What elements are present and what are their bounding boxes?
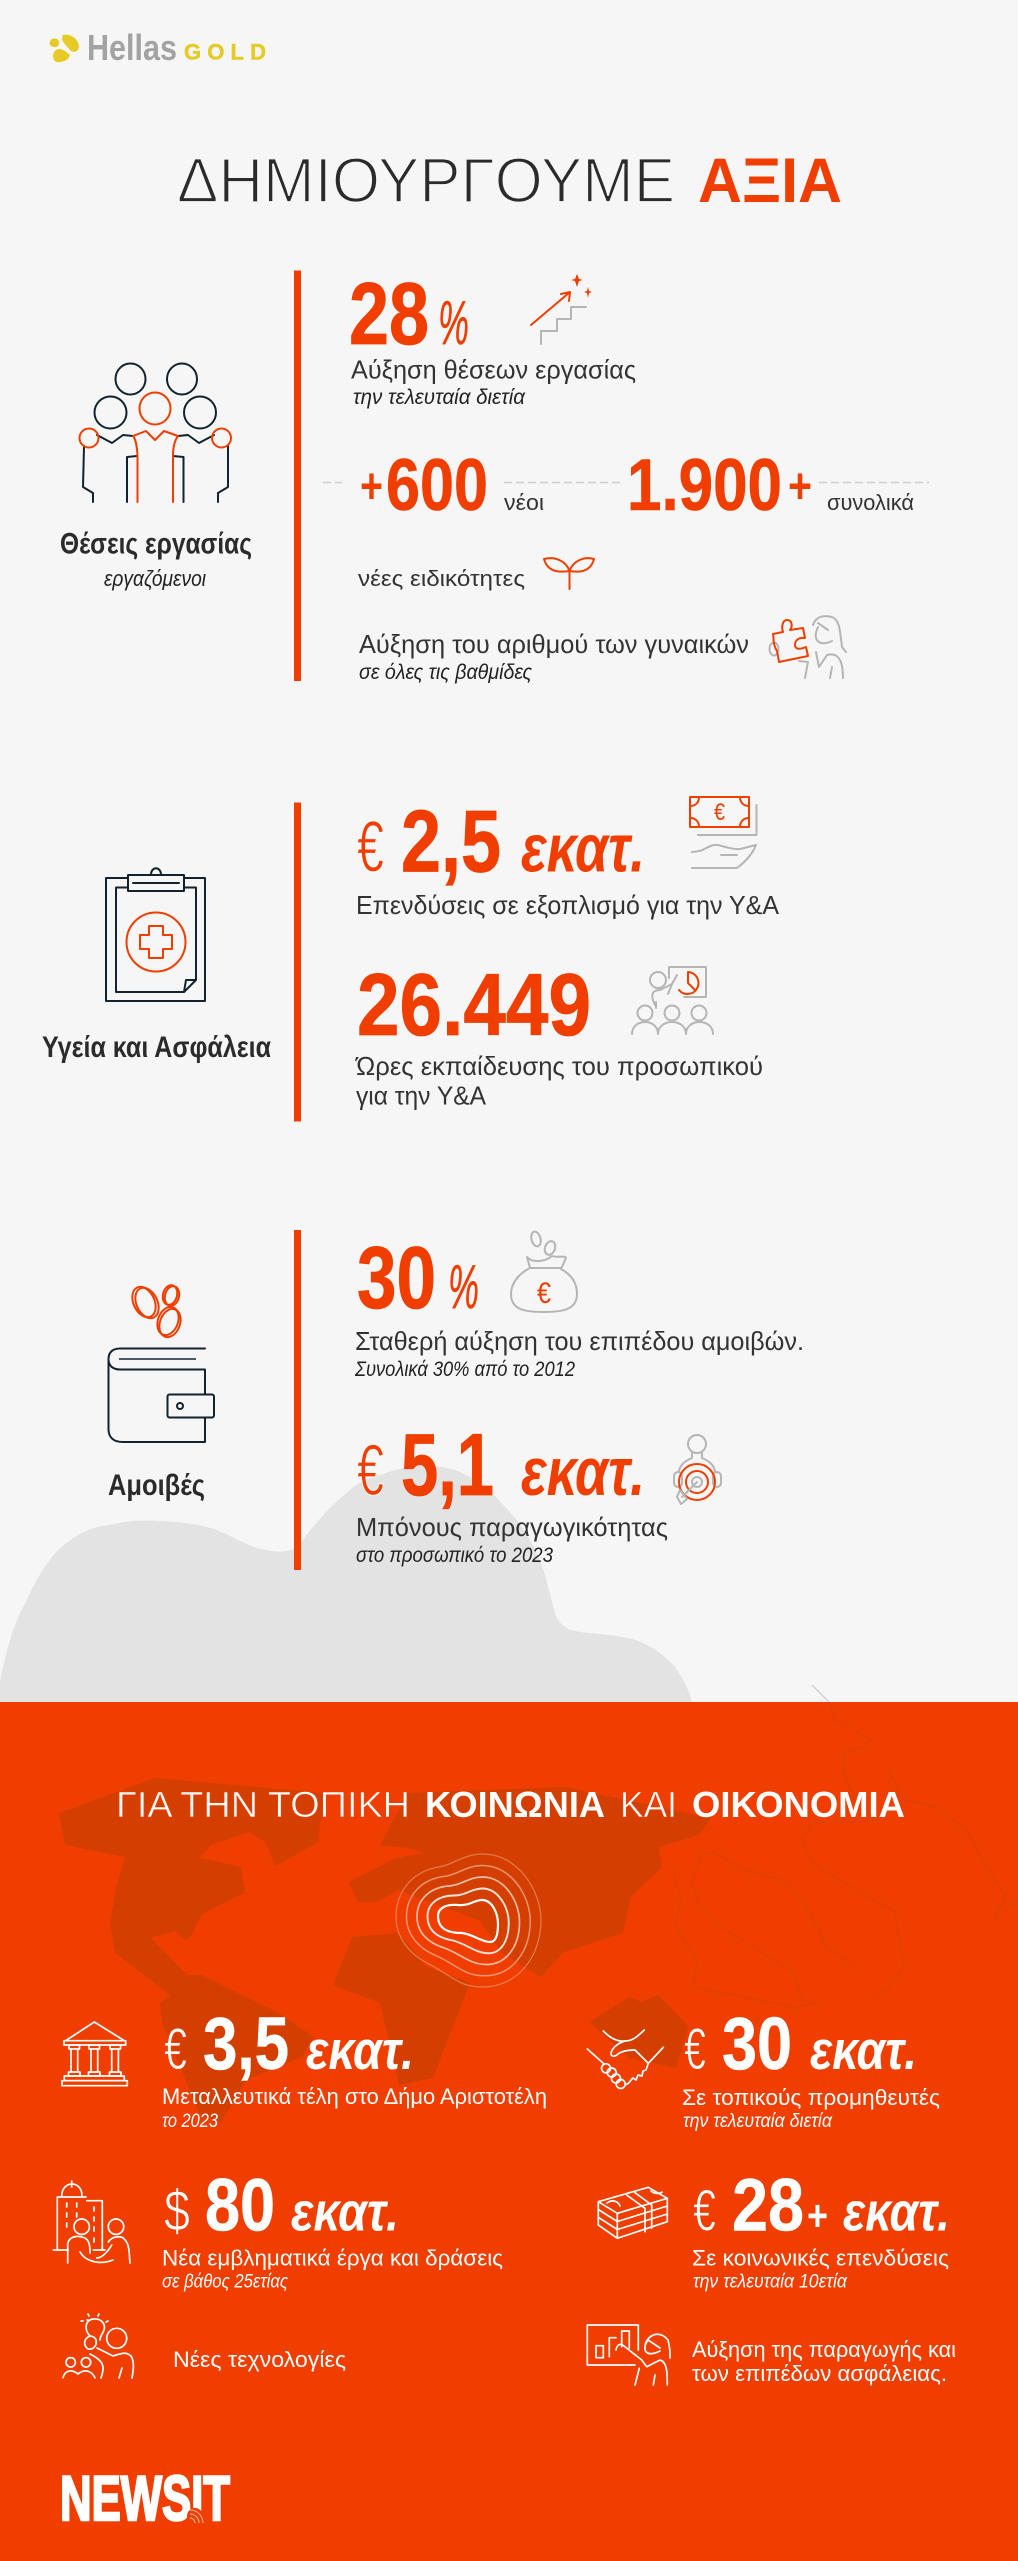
text: training hours [355, 1051, 763, 1110]
stat: 80 million dollars [164, 2164, 399, 2246]
icon: group of people [80, 364, 231, 502]
text: new specialties: νέες ειδικότητες [358, 566, 525, 591]
text: production and safety levels: Αύξηση της παραγωγής και [692, 2337, 956, 2362]
stat: 3.5 million euro: 3,5 [203, 2002, 289, 2085]
text: all levels: σε όλες τις βαθμίδες [359, 661, 533, 684]
stat: +600 new: νέοι [504, 490, 544, 515]
text: last decade: την τελευταία 10ετία [693, 2272, 848, 2292]
icon: money bag: € [537, 1277, 551, 1310]
stat: 80 million dollars: $ [164, 2178, 190, 2244]
stat: 2.5 million euro: εκατ. [521, 810, 645, 886]
orange section background [0, 1702, 1018, 2561]
stat: 30%: % [448, 1253, 479, 1322]
panel: health and safety [42, 792, 780, 1122]
section heading: ΚΟΙΝΩΝΙΑ [425, 1784, 605, 1825]
stat: 1.900+ total: + [788, 458, 812, 514]
stat: 2.5 million euro [357, 792, 645, 890]
logo: Hellas Gold: Hellas [87, 27, 177, 68]
stat: +600 new [360, 445, 544, 526]
section heading: ΟΙΚΟΝΟΜΙΑ [692, 1784, 905, 1825]
item: new technologies [63, 2314, 346, 2378]
text: women growth: Αύξηση του αριθμού των γυναικών [359, 629, 749, 659]
stat: 80 million dollars: εκατ. [291, 2180, 399, 2242]
text: job growth: Αύξηση θέσεων εργασίας [351, 354, 636, 384]
text: local suppliers: Σε τοπικούς προμηθευτές [682, 2085, 940, 2110]
icon: woman with puzzle [770, 616, 846, 678]
item: flagship projects [53, 2164, 503, 2292]
icon: handshake [587, 2030, 663, 2088]
panel: remuneration [108, 1228, 804, 1570]
stat: 5.1 million euro: € [357, 1431, 384, 1511]
logo: Hellas Gold: GOLD [184, 40, 266, 64]
world map [59, 1778, 711, 2123]
stat: 30 million euro [684, 2002, 917, 2085]
stat: 5.1 million euro: 5,1 [401, 1415, 494, 1514]
section heading [116, 1784, 905, 1825]
decorative grey hill [0, 1466, 692, 1702]
stat: 26.449: 26.449 [357, 955, 591, 1054]
item: production and safety [587, 2325, 956, 2386]
icon: city and people [53, 2181, 130, 2263]
regional map outline [673, 1702, 1018, 2008]
icon: rising stairs [531, 274, 592, 344]
stat: 28+ million euro [693, 2164, 950, 2246]
icon: temple [62, 2022, 127, 2086]
concentric rings graphic [396, 1854, 541, 1987]
icon: clipboard [106, 868, 205, 1001]
stat: 28+ million euro: εκατ. [843, 2180, 950, 2242]
stat: 28+ million euro: + [807, 2192, 828, 2240]
icon: target person [674, 1435, 721, 1504]
icon: presentation [632, 967, 713, 1034]
stat: 30 million euro: εκατ. [810, 2019, 917, 2081]
text: total since 2012: Συνολικά 30% από το 2012 [354, 1358, 575, 1381]
stat: 30 million euro: 30 [722, 2002, 792, 2085]
subheading: employees: εργαζόμενοι [104, 566, 206, 591]
stat: 2.5 million euro: 2,5 [401, 792, 501, 890]
text: equipment investment: Επενδύσεις σε εξοπλισμό για την Υ&Α [356, 890, 780, 920]
stat: 1.900+ total [627, 445, 914, 526]
text: mining fees: Μεταλλευτικά τέλη στο Δήμο Αριστοτέλη [162, 2084, 547, 2109]
icon: coins and wallet [108, 1283, 214, 1442]
title: ΔΗΜΙΟΥΡΓΟΥΜΕ [177, 146, 675, 216]
divider bar [294, 802, 301, 1122]
logo: Hellas Gold [50, 27, 266, 68]
icon: idea and people [63, 2314, 133, 2378]
divider bar [294, 270, 301, 681]
dashed line [323, 482, 929, 484]
item: social investment [598, 2164, 950, 2292]
stat: 5.1 million euro [357, 1415, 645, 1514]
icon: money in hand [690, 797, 756, 868]
item: local suppliers [587, 2002, 940, 2132]
text: last two years: την τελευταία διετία [683, 2111, 833, 2132]
icon: cash stack [598, 2187, 667, 2238]
logo: NewsIt: NEWSIT [60, 2464, 230, 2534]
stat: 3.5 million euro: εκατ. [306, 2019, 414, 2081]
stat: 28+ million euro: 28 [732, 2164, 804, 2246]
stat: 80 million dollars: 80 [205, 2164, 275, 2246]
text: last two years: την τελευταία διετία [353, 386, 526, 409]
stat: 3.5 million euro [164, 2002, 414, 2085]
item: mining fees [62, 2002, 547, 2132]
text: staff in 2023: στο προσωπικό το 2023 [356, 1544, 553, 1567]
stat: 28%: % [438, 289, 469, 358]
stat: 30%: 30 [357, 1228, 436, 1327]
text: steady remuneration increase: Σταθερή αύξηση του επιπέδου αμοιβών. [355, 1326, 804, 1356]
text: production and safety levels [692, 2337, 956, 2386]
logo: NewsIt [60, 2464, 230, 2534]
icon: woman with chart [587, 2325, 670, 2385]
section heading: ΚΑΙ [620, 1784, 677, 1825]
text: new technologies: Νέες τεχνολογίες [173, 2347, 346, 2372]
text: training hours: Ώρες εκπαίδευσης του προσωπικού [355, 1051, 763, 1081]
text: over 25 years: σε βάθος 25ετίας [162, 2272, 289, 2292]
heading: remuneration: Αμοιβές [108, 1469, 205, 1502]
stat: 28%: 28 [349, 264, 429, 363]
title: ΑΞΙΑ [698, 146, 842, 216]
divider bar [294, 1230, 301, 1570]
section heading: ΓΙΑ ΤΗΝ ΤΟΠΙΚΗ [116, 1784, 410, 1825]
text: flagship projects: Νέα εμβληματικά έργα και δράσεις [162, 2246, 503, 2270]
text: social investment: Σε κοινωνικές επενδύσεις [692, 2246, 949, 2270]
stat: +600 new: + [360, 458, 383, 514]
stat: +600 new: 600 [386, 445, 488, 526]
stat: 28+ million euro: € [693, 2178, 716, 2244]
stat: 2.5 million euro: € [357, 808, 384, 888]
text: production and safety levels: των επιπέδων ασφάλειας. [692, 2361, 947, 2386]
heading: health and safety: Υγεία και Ασφάλεια [42, 1031, 271, 1064]
panel: jobs [60, 264, 929, 684]
stat: 1.900+ total: συνολικά [827, 490, 914, 515]
stat: 3.5 million euro: € [164, 2017, 187, 2082]
icon: sprout [544, 558, 594, 589]
text: training hours: για την Υ&Α [356, 1080, 487, 1110]
text: productivity bonus: Μπόνους παραγωγικότητας [356, 1512, 668, 1542]
stat: 5.1 million euro: εκατ. [521, 1434, 645, 1510]
icon: money bag [511, 1231, 577, 1312]
text: in 2023: το 2023 [162, 2111, 218, 2132]
icon: money in hand: € [714, 799, 726, 826]
stat: 30 million euro: € [684, 2017, 706, 2082]
heading: jobs: Θέσεις εργασίας [60, 528, 252, 560]
stat: 1.900+ total: 1.900 [627, 445, 782, 526]
